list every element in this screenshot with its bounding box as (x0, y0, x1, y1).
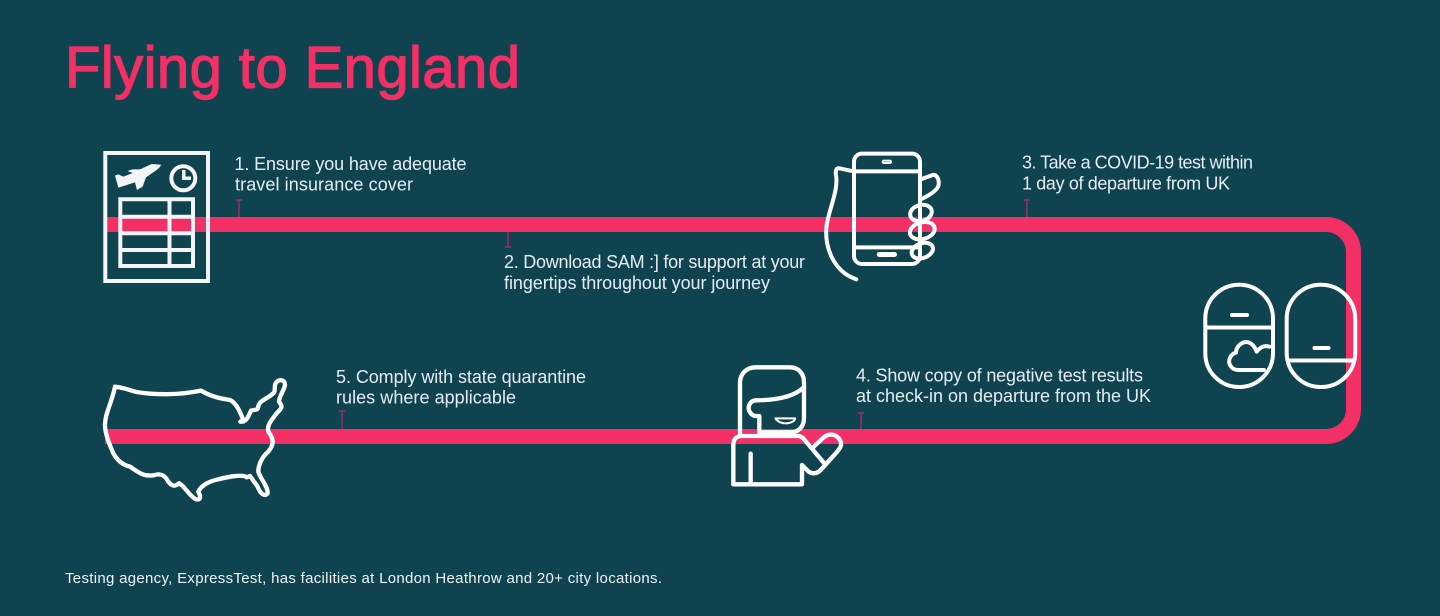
footnote: Testing agency, ExpressTest, has facilities at London Heathrow and 20+ city locations. (65, 570, 662, 587)
itinerary table (120, 199, 193, 266)
phone (854, 154, 920, 264)
icon: map of USA (105, 380, 285, 500)
icon: travel document (105, 153, 208, 281)
icon: person waving (733, 367, 841, 484)
document outline (105, 153, 208, 281)
window with shade lowered (1287, 285, 1355, 387)
step 3 text: 1 day of departure from UK (1022, 174, 1230, 194)
step 2 text: fingertips throughout your journey (504, 273, 770, 293)
smile (775, 418, 795, 423)
head and hair (740, 367, 804, 435)
step 4 text: at check-in on departure from the UK (856, 386, 1151, 406)
step 1 text (234, 154, 466, 194)
step 1 text: travel insurance cover (235, 174, 413, 194)
step 5 text: rules where applicable (336, 388, 516, 408)
window with cloud (1205, 285, 1273, 387)
tick: step 2 (505, 232, 511, 247)
icon: aircraft windows (1205, 285, 1355, 387)
step 2 text (504, 252, 805, 293)
step 5 text (336, 367, 586, 408)
step 5 text: 5. Comply with state quarantine (336, 367, 586, 387)
tick: step 5 (339, 411, 345, 429)
step 3 text (1022, 152, 1253, 194)
icon: hand holding phone (826, 154, 939, 279)
body and arm (733, 435, 841, 484)
hand (826, 168, 939, 279)
airplane (115, 164, 161, 190)
step 1 text: 1. Ensure you have adequate (234, 154, 466, 174)
step 3 text: 3. Take a COVID-19 test within (1022, 152, 1253, 172)
tick: step 4 (858, 413, 864, 429)
step 2 text: 2. Download SAM :] for support at your (504, 252, 805, 272)
title: Flying to England (65, 36, 520, 100)
tick: step 1 (236, 200, 242, 217)
journey route line (105, 224, 1354, 436)
step 4 text (856, 366, 1151, 406)
step 4 text: 4. Show copy of negative test results (856, 366, 1143, 386)
tick: step 3 (1024, 200, 1030, 217)
clock (171, 166, 195, 190)
